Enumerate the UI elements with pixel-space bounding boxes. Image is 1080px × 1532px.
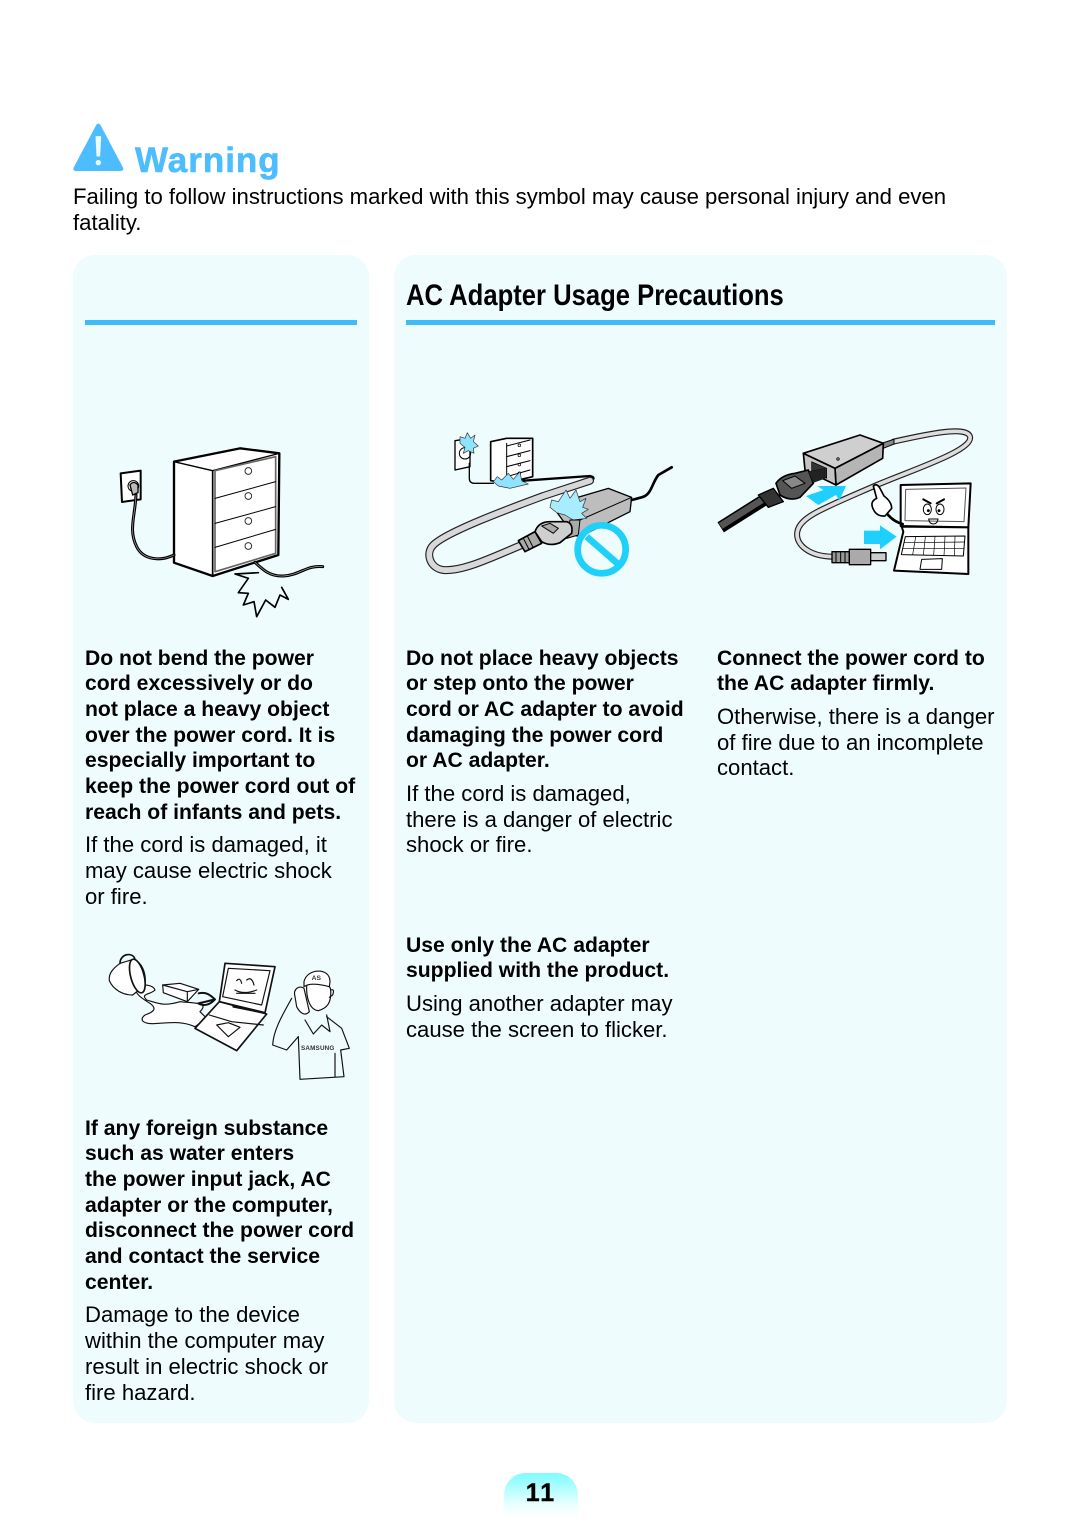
bold warning: or AC adapter. — [406, 749, 550, 772]
text block: connect the power cord firmly — [717, 646, 995, 780]
text block: foreign substance — [85, 1116, 354, 1405]
bold warning: center. — [85, 1271, 153, 1294]
text block: do not place heavy objects — [406, 646, 684, 857]
bold warning: damaging the power cord — [406, 724, 663, 747]
bold warning: cord excessively or do — [85, 672, 313, 695]
bold warning: disconnect the power cord — [85, 1219, 354, 1242]
explanation: Damage to the device — [85, 1302, 300, 1327]
bold warning: the AC adapter firmly. — [717, 672, 934, 695]
bold warning: or step onto the power — [406, 672, 634, 695]
explanation: or fire. — [85, 884, 148, 909]
explanation — [717, 704, 995, 780]
page number tab: 11 — [526, 1479, 556, 1507]
heading: AC Adapter Usage Precautions: AC Adapter Usage Precautions — [406, 279, 784, 312]
bold warning: keep the power cord out of — [85, 775, 355, 798]
bold warning: such as water enters — [85, 1142, 294, 1165]
explanation — [406, 781, 672, 857]
text block: use only supplied adapter — [406, 934, 673, 1042]
bold warning: supplied with the product. — [406, 959, 669, 982]
bold warning: especially important to — [85, 749, 315, 772]
bold warning: reach of infants and pets. — [85, 801, 341, 824]
illustration: heavy object on adapter with prohibition sign — [425, 432, 674, 577]
illustration: spilled water and service technician: AS — [312, 975, 321, 982]
bold warning — [406, 646, 684, 772]
illustration: connect power cord to adapter and laptop — [718, 428, 974, 575]
bold warning: Do not bend the power — [85, 646, 314, 670]
explanation: there is a danger of electric — [406, 807, 672, 832]
intro text: Failing to follow instructions marked with this symbol may cause personal injury and even — [73, 184, 946, 209]
panel: right column — [394, 255, 1007, 1423]
title: Warning: Warning — [135, 141, 281, 180]
bold warning — [406, 934, 669, 982]
illustration: dresser on power cord — [120, 447, 324, 618]
intro text — [73, 184, 946, 235]
explanation: may cause electric shock — [85, 858, 332, 883]
explanation: Using another adapter may — [406, 991, 673, 1016]
bold warning: Connect the power cord to — [717, 646, 985, 670]
explanation: of fire due to an incomplete — [717, 730, 984, 755]
explanation — [406, 991, 673, 1042]
explanation — [85, 832, 332, 909]
bold warning — [85, 1116, 354, 1294]
illustration: spilled water and service technician — [108, 954, 350, 1080]
spark at outlet — [460, 433, 478, 453]
explanation: If the cord is damaged, it — [85, 832, 327, 857]
explanation: result in electric shock or — [85, 1354, 328, 1379]
explanation — [85, 1302, 328, 1405]
bold warning: and contact the service — [85, 1245, 320, 1268]
explanation: within the computer may — [85, 1328, 324, 1353]
bold warning: If any foreign substance — [85, 1116, 328, 1140]
explanation: Otherwise, there is a danger — [717, 704, 995, 729]
explanation: shock or fire. — [406, 832, 532, 857]
icon: warning triangle — [73, 124, 124, 171]
bold warning: the power input jack, AC — [85, 1168, 331, 1191]
bold warning: over the power cord. It is — [85, 724, 335, 747]
panel: left column — [73, 255, 369, 1423]
bold warning: Use only the AC adapter — [406, 934, 650, 956]
intro text: fatality. — [73, 210, 141, 235]
illustration: spilled water and service technician: SAMSUNG — [301, 1045, 335, 1052]
bold warning: adapter or the computer, — [85, 1194, 333, 1217]
explanation: fire hazard. — [85, 1380, 196, 1405]
text block: do not bend the power cord — [85, 646, 356, 909]
page number tab — [504, 1473, 578, 1518]
explanation: contact. — [717, 755, 794, 780]
bold warning: Do not place heavy objects — [406, 646, 679, 670]
bold warning: cord or AC adapter to avoid — [406, 698, 684, 721]
explanation: cause the screen to flicker. — [406, 1017, 668, 1042]
bold warning: not place a heavy object — [85, 698, 329, 721]
bold warning — [717, 646, 985, 695]
explanation: If the cord is damaged, — [406, 781, 631, 806]
bold warning — [85, 646, 356, 824]
